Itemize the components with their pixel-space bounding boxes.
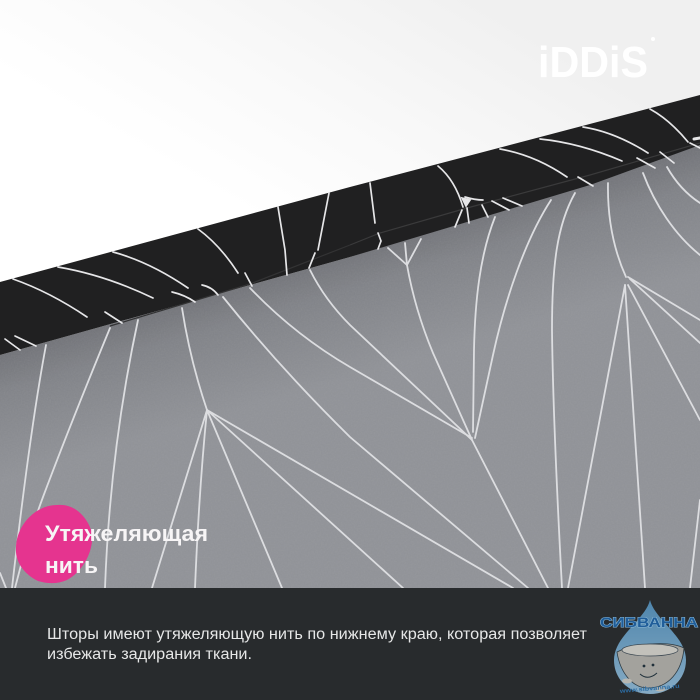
fabric pattern: white geometric lines xyxy=(0,167,700,588)
footer panel xyxy=(0,588,700,700)
hem pattern: white lines on black xyxy=(5,109,700,350)
panel: grey curtain fabric xyxy=(0,140,700,590)
background: white upper area xyxy=(0,0,700,360)
badge heading xyxy=(45,521,208,578)
icon: water drop xyxy=(614,600,686,694)
watermark logo: Sibvanna xyxy=(600,600,698,695)
icon: bathtub xyxy=(617,644,684,692)
footer description text: Шторы имеют утяжеляющую нить по нижнему краю, которая позволяет xyxy=(47,626,587,643)
badge heading: нить xyxy=(45,553,98,578)
watermark url: www.sibvanna.ru xyxy=(618,684,680,695)
pink badge blob xyxy=(16,505,92,583)
footer description text: избежать задирания ткани. xyxy=(47,646,252,663)
brand logo: IDDIS: iDDiS xyxy=(538,38,648,87)
panel: black hem xyxy=(0,95,700,355)
badge heading: Утяжеляющая xyxy=(45,521,208,546)
watermark name: СИБВАННА xyxy=(600,615,698,630)
footer description text xyxy=(47,626,587,663)
